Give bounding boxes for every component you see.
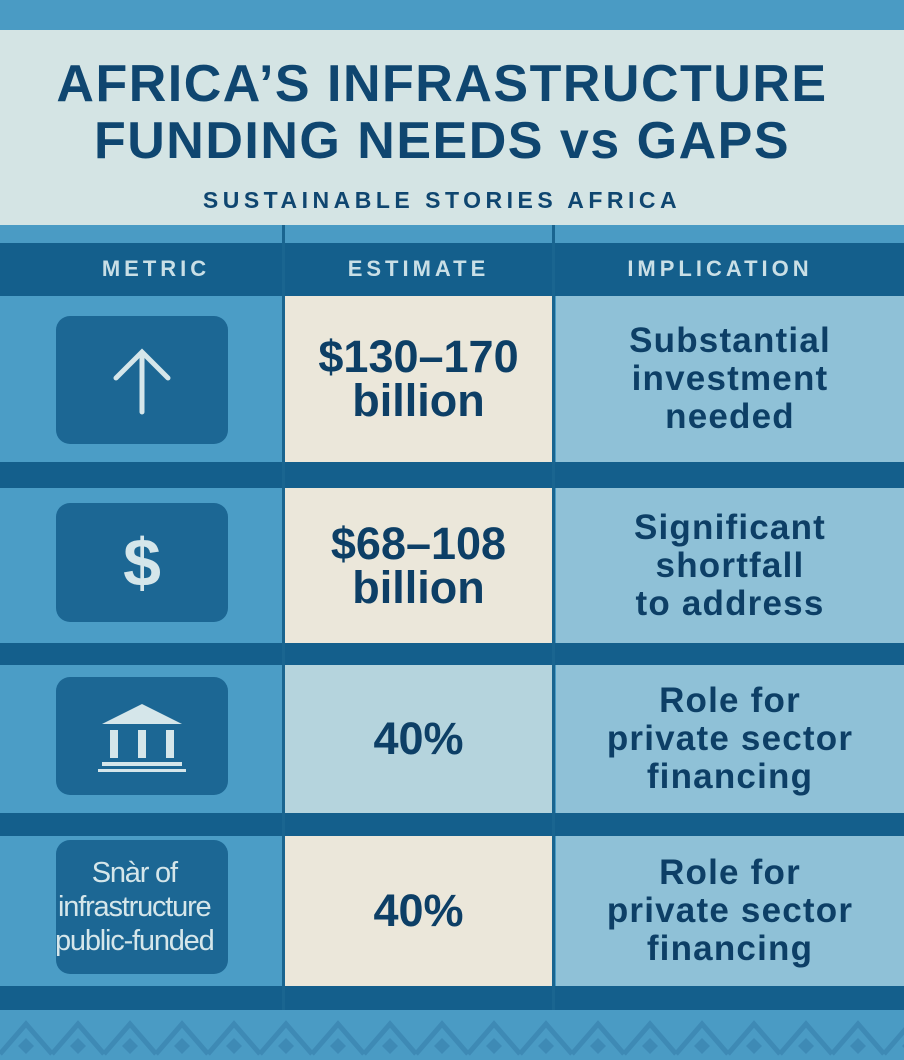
estimate 4: 40% <box>373 885 464 936</box>
implication 2: Significant <box>634 508 826 546</box>
implication 3: private sector <box>607 719 853 758</box>
icon: bank <box>56 677 228 795</box>
implication 2: to address <box>635 584 824 622</box>
estimate 2: $68–108 <box>331 518 506 568</box>
implication 3 <box>556 665 904 813</box>
title: AFRICA’S INFRASTRUCTURE <box>56 55 828 113</box>
estimate 1: $130–170 <box>318 331 519 382</box>
estimate 1: billion <box>352 375 485 426</box>
header: metric: METRIC <box>102 256 210 281</box>
title: FUNDING NEEDS vs GAPS <box>94 112 790 170</box>
implication 4: Role for <box>659 853 801 892</box>
implication 1 <box>556 296 904 462</box>
icon: text box: Snàr of <box>92 857 177 889</box>
row 4 <box>55 836 904 986</box>
bottom pattern <box>0 1020 904 1056</box>
header band <box>0 243 904 296</box>
header: estimate: ESTIMATE <box>348 256 489 281</box>
implication 1: Substantial <box>629 321 831 360</box>
icon: dollar <box>56 503 228 622</box>
title panel <box>0 30 904 225</box>
estimate 2: billion <box>352 562 485 612</box>
row 1 <box>56 296 904 462</box>
estimate 3 <box>285 665 552 813</box>
icon: up arrow <box>56 316 228 444</box>
implication 4: private sector <box>607 891 853 930</box>
implication 1: needed <box>665 397 795 436</box>
icon: text box: public-funded <box>55 925 214 957</box>
implication 1: investment <box>632 359 828 398</box>
estimate 3: 40% <box>373 713 464 764</box>
icon: dollar: $ <box>123 524 161 600</box>
icon: text box: infrastructure <box>58 891 210 923</box>
implication 2: shortfall <box>656 546 804 584</box>
estimate 2 <box>285 488 552 643</box>
implication 4: financing <box>647 929 813 968</box>
implication 3: Role for <box>659 681 801 720</box>
subtitle: SUSTAINABLE STORIES AFRICA <box>203 187 681 213</box>
implication 4 <box>556 836 904 986</box>
row 2 <box>56 488 904 643</box>
implication 3: financing <box>647 757 813 796</box>
estimate 1 <box>285 296 552 462</box>
implication 2 <box>556 488 904 643</box>
title <box>56 55 828 170</box>
row 3 <box>56 665 904 813</box>
estimate 4 <box>285 836 552 986</box>
header: implication: IMPLICATION <box>627 256 813 281</box>
icon: text box <box>56 840 228 974</box>
